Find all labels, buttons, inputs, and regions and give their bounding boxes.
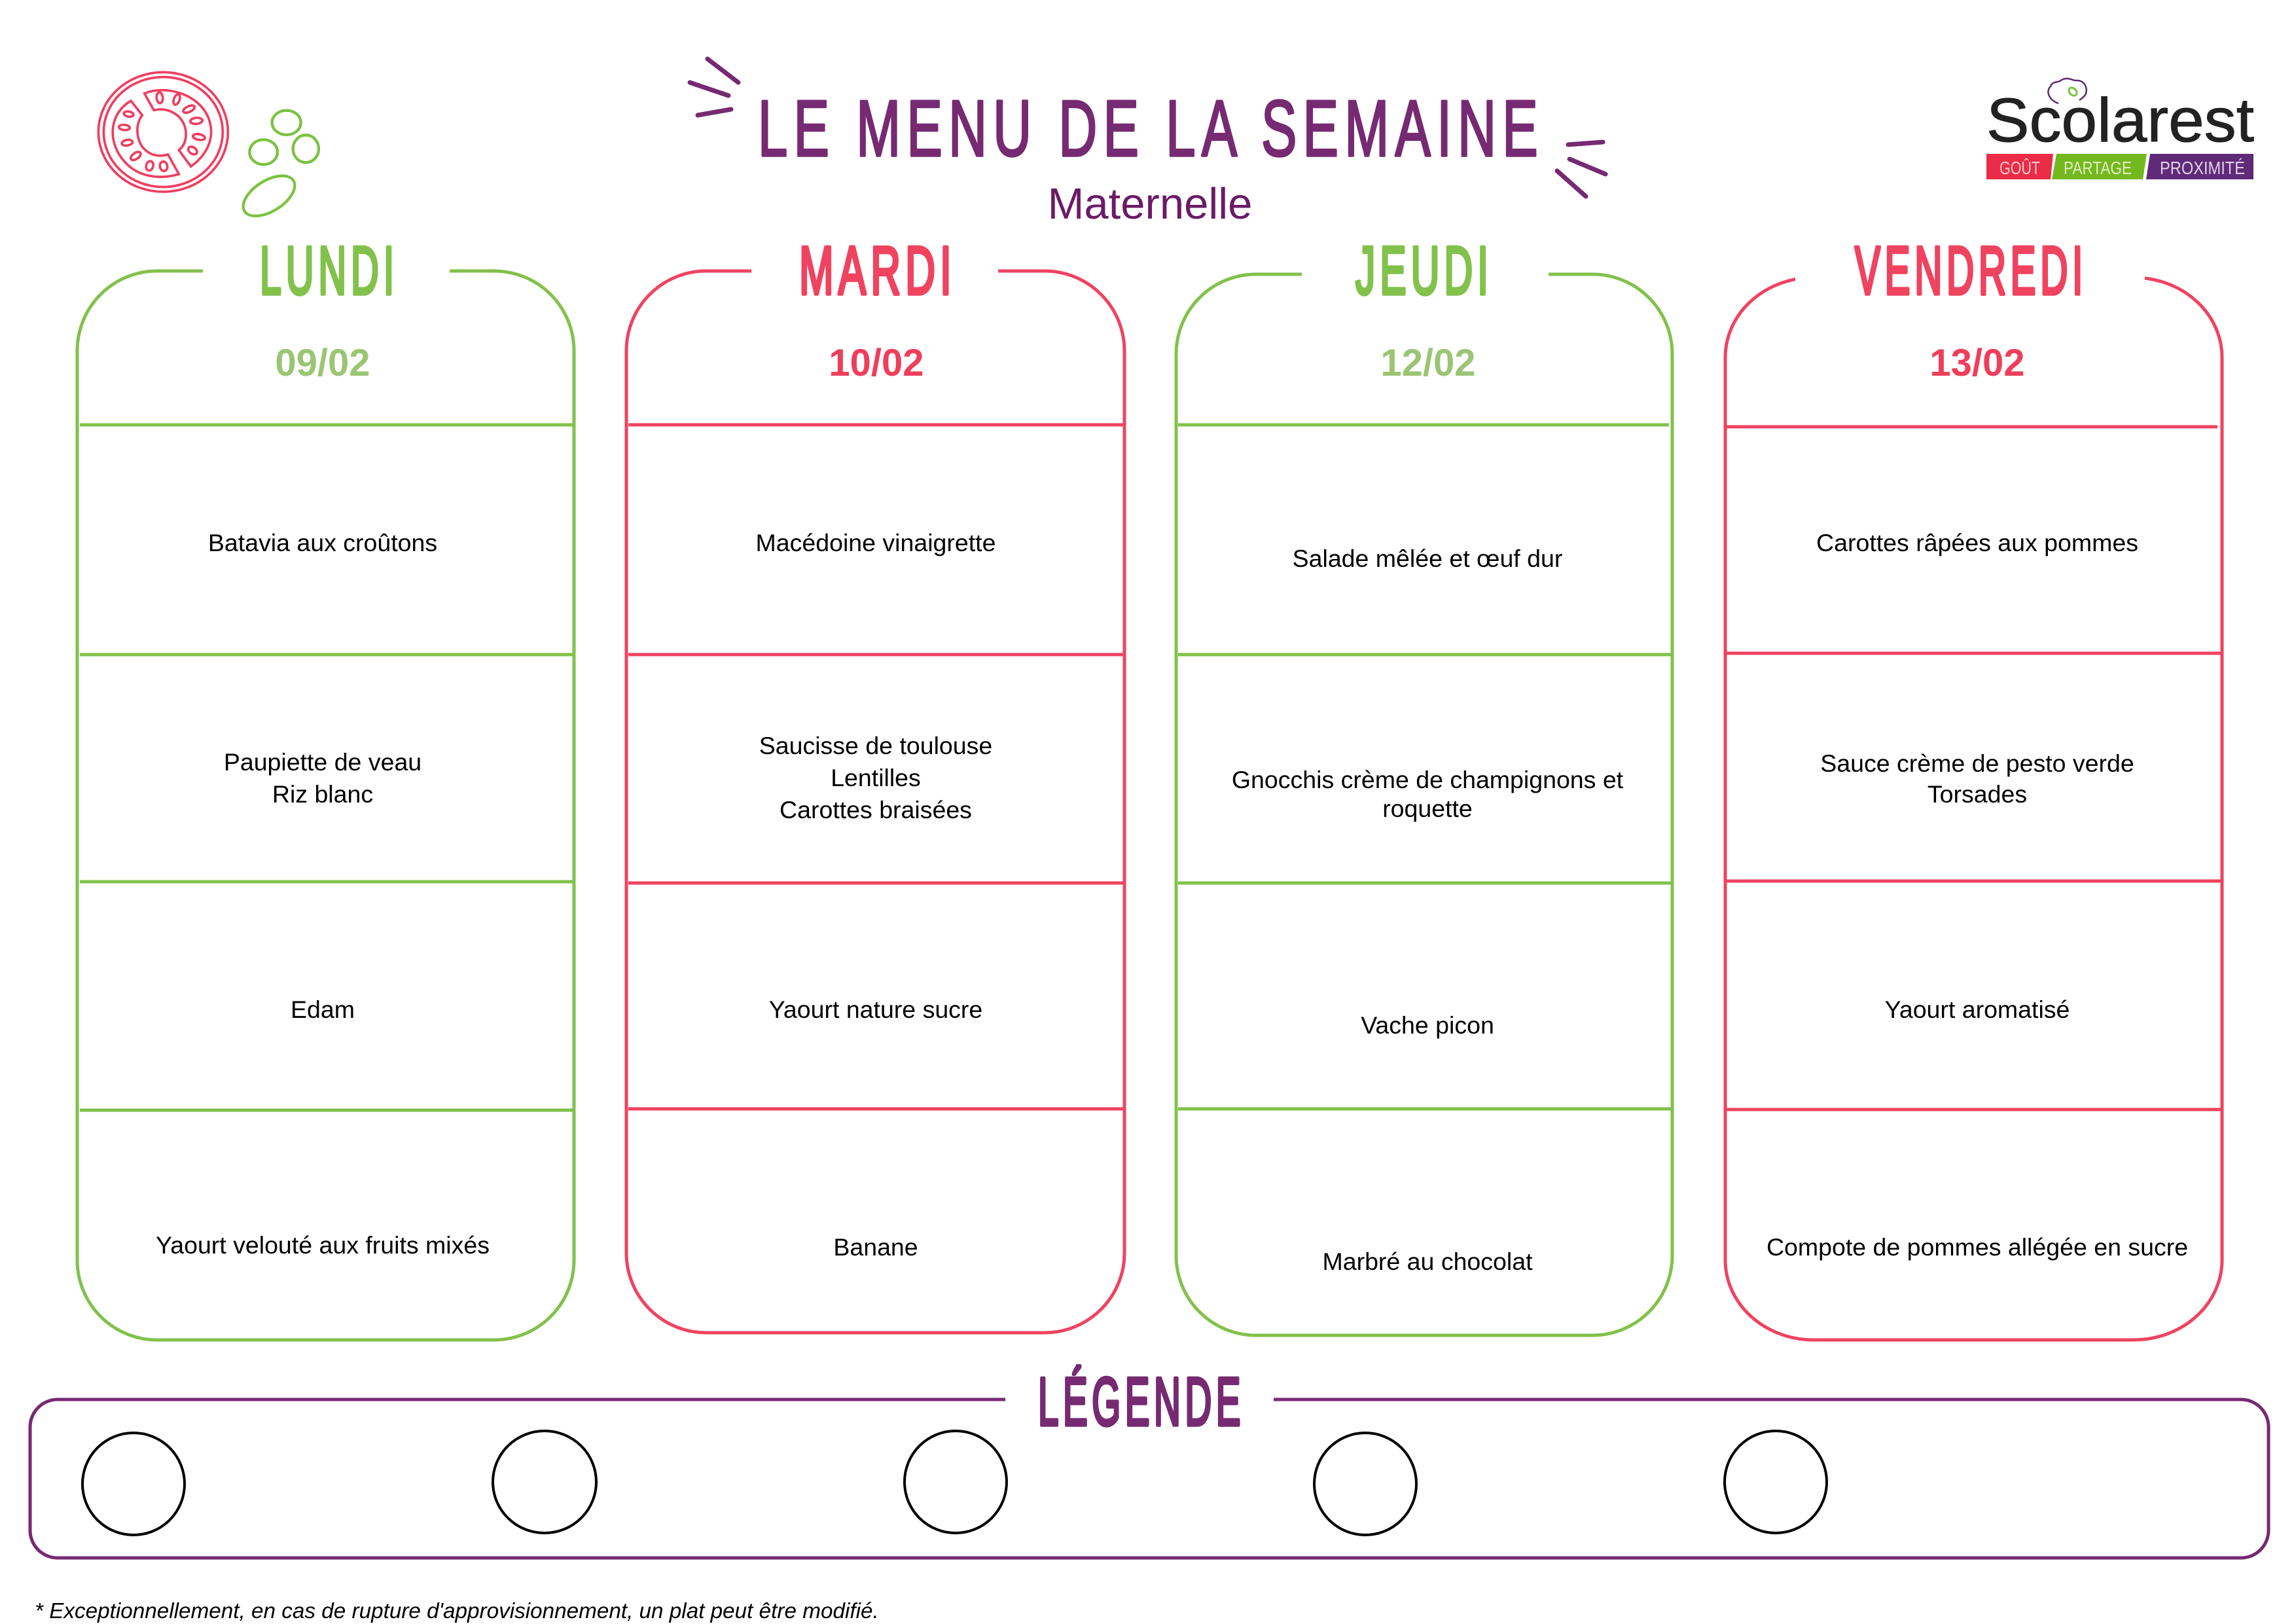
heading: vendredi: VENDREDI bbox=[1855, 233, 2087, 309]
dish: plat mardi: Saucisse de toulouse bbox=[759, 732, 992, 759]
subtitle: Maternelle bbox=[1048, 179, 1252, 228]
dish: fromage lundi: Edam bbox=[291, 996, 355, 1023]
heading: lundi: LUNDI bbox=[260, 233, 399, 309]
panel: lundi bbox=[77, 233, 574, 1340]
row dividers: mardi bbox=[628, 425, 1123, 1109]
dish: plat mardi bbox=[759, 732, 992, 823]
heading: legend: LÉGENDE bbox=[1038, 1364, 1245, 1440]
logo: Scolarest: PARTAGE bbox=[2064, 158, 2132, 178]
footnote: * Exceptionnellement, en cas de rupture d'approvisionnement, un plat peut être modifié. bbox=[35, 1599, 879, 1623]
panel: jeudi bbox=[1176, 233, 1672, 1335]
legend circles bbox=[82, 1431, 1827, 1535]
panel: vendredi bbox=[1725, 233, 2222, 1340]
title rays left bbox=[690, 59, 738, 115]
dish: entrée vendredi: Carottes râpées aux pommes bbox=[1816, 529, 2138, 556]
row dividers: lundi bbox=[80, 425, 574, 1110]
date: lundi: 09/02 bbox=[275, 342, 370, 384]
dish: plat lundi: Paupiette de veau bbox=[224, 748, 422, 776]
heading: mardi: MARDI bbox=[799, 233, 956, 309]
dish: entrée mardi: Macédoine vinaigrette bbox=[756, 529, 996, 556]
logo: Scolarest: GOÛT bbox=[2000, 158, 2040, 178]
dish: plat mardi: Lentilles bbox=[831, 764, 921, 791]
dish: compote vendredi: Compote de pommes allégée en sucre bbox=[1767, 1233, 2188, 1261]
title: LE MENU DE LA SEMAINE bbox=[758, 84, 1544, 173]
row dividers: vendredi bbox=[1727, 427, 2222, 1110]
heading: jeudi: JEUDI bbox=[1355, 233, 1493, 309]
panel: mardi bbox=[626, 233, 1124, 1333]
row dividers: jeudi bbox=[1178, 425, 1672, 1109]
dish: fromage jeudi: Vache picon bbox=[1361, 1011, 1494, 1039]
dish: plat lundi bbox=[224, 748, 422, 808]
date: vendredi: 13/02 bbox=[1929, 342, 2025, 384]
logo: Scolarest bbox=[1986, 79, 2254, 179]
dish: fruit mardi: Banane bbox=[833, 1233, 918, 1261]
logo: Scolarest: PROXIMITÉ bbox=[2160, 158, 2245, 178]
dish: plat jeudi bbox=[1232, 766, 1624, 822]
dish: dessert jeudi: Marbré au chocolat bbox=[1322, 1248, 1533, 1275]
logo: Scolarest: Scolarest bbox=[1986, 86, 2254, 155]
dish: plat mardi: Carottes braisées bbox=[780, 796, 972, 823]
dish: plat jeudi: roquette bbox=[1382, 795, 1473, 822]
dish: plat vendredi: Torsades bbox=[1928, 780, 2027, 808]
title rays right bbox=[1557, 142, 1605, 196]
dish: plat jeudi: Gnocchis crème de champignons et bbox=[1232, 766, 1624, 793]
dish: dessert lacté mardi: Yaourt nature sucre bbox=[769, 996, 982, 1023]
panel: legend bbox=[30, 1364, 2269, 1558]
dish: entrée jeudi: Salade mêlée et œuf dur bbox=[1293, 545, 1562, 572]
date: jeudi: 12/02 bbox=[1380, 342, 1476, 384]
icon: tomato slice bbox=[98, 72, 228, 192]
dish: plat lundi: Riz blanc bbox=[272, 780, 373, 808]
dish: entrée lundi: Batavia aux croûtons bbox=[208, 529, 437, 556]
dish: plat vendredi: Sauce crème de pesto verde bbox=[1820, 749, 2134, 777]
icon: green peas bbox=[236, 111, 319, 224]
dish: dessert lundi: Yaourt velouté aux fruits mixés bbox=[156, 1231, 490, 1259]
dish: dessert lacté vendredi: Yaourt aromatisé bbox=[1885, 996, 2070, 1023]
dish: plat vendredi bbox=[1820, 749, 2134, 808]
date: mardi: 10/02 bbox=[829, 342, 924, 384]
